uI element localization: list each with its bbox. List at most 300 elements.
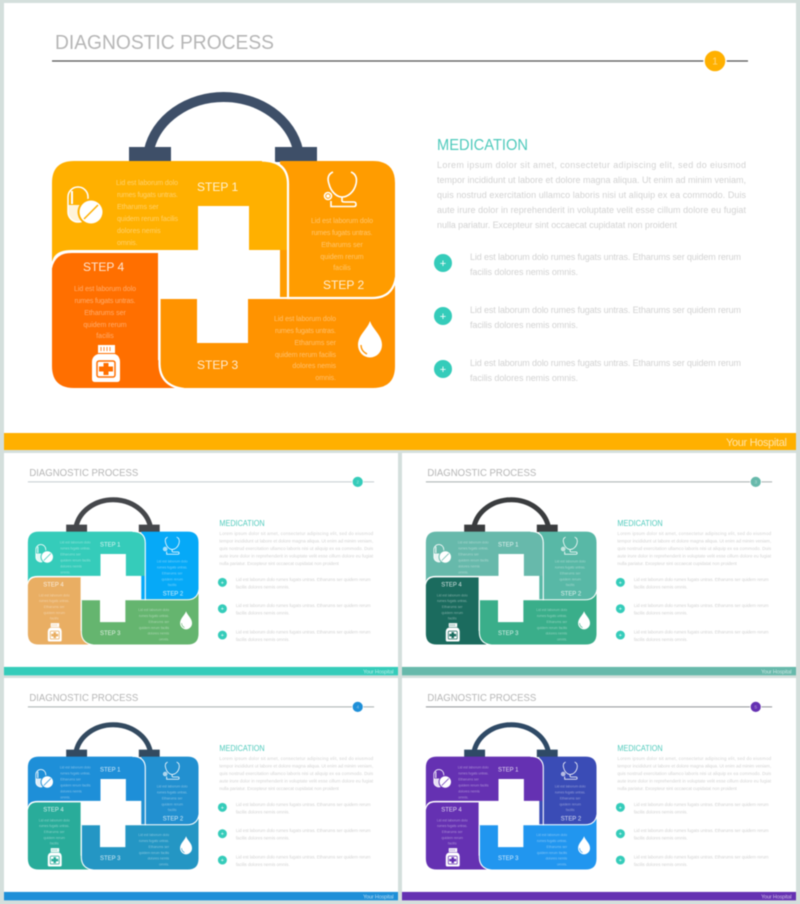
bullet 1: +: [619, 580, 622, 586]
step 2 text: facilis: [168, 808, 177, 812]
step 2 text: quidem rerum: [559, 802, 581, 806]
body paragraph: [219, 531, 374, 566]
bag handle: [464, 500, 558, 532]
step 2 text: rumes fugats untras.: [555, 565, 585, 569]
step 2 text: Etharums ser: [560, 571, 581, 575]
step 4 text: Etharums ser: [442, 830, 463, 834]
body paragraph: Lorem ipsum dolor sit amet, consectetur adipiscing elit, sed do eiusmod: [617, 531, 772, 536]
bullet 2: [434, 305, 741, 330]
step 3 label: STEP 3: [100, 631, 121, 637]
step 4 text: Lid est laborum dolo: [39, 818, 70, 822]
bullet 3: +: [221, 633, 224, 639]
step 3 text: Etharums ser: [547, 620, 568, 624]
step 3 text: omnis.: [557, 638, 567, 642]
step 4 text: Lid est laborum dolo: [437, 593, 468, 597]
title: DIAGNOSTIC PROCESS: [29, 693, 139, 704]
step 2 text: Lid est laborum dolo: [555, 559, 586, 563]
step 4 text: facilis: [50, 842, 59, 846]
step 2 text: facilis: [566, 808, 575, 812]
footer bar: Your Hospital: [726, 437, 787, 449]
bullet 3: +: [619, 633, 622, 639]
step 3 text: dolores nemis: [546, 632, 567, 636]
step 2 text: [311, 218, 373, 272]
step 4 text: [437, 593, 468, 621]
step 3 text: [536, 833, 568, 867]
bullet 2: [218, 828, 371, 841]
bullet 2: +: [619, 607, 622, 613]
step 1 text: Lid est laborum dolo: [60, 541, 91, 545]
icon: water drop: [180, 611, 192, 629]
step 4 label: STEP 4: [441, 807, 462, 813]
step 1 text: [458, 766, 489, 799]
bullet 1: facilis dolores nemis omnis.: [634, 809, 688, 814]
step 1 text: omnis.: [117, 240, 138, 247]
page number badge: 1: [712, 56, 718, 68]
step 2 text: rumes fugats untras.: [312, 230, 373, 237]
step 1 text: quidem rerum facilis: [458, 558, 489, 562]
step 4 text: rumes fugats untras.: [437, 824, 467, 828]
step 2 text: quidem rerum: [559, 577, 581, 581]
step 1 label: STEP 1: [498, 768, 519, 774]
footer bar: [402, 892, 796, 900]
step 1 text: [60, 766, 91, 799]
bullet 1: facilis dolores nemis omnis.: [236, 584, 290, 589]
step 1 text: Etharums ser: [458, 552, 480, 556]
panel: step 3: [81, 808, 199, 870]
bullet 2: [616, 828, 769, 841]
step 2 text: [555, 784, 586, 812]
step 4 text: facilis: [96, 333, 114, 340]
heading: medication: MEDICATION: [219, 519, 265, 528]
step 2 text: Lid est laborum dolo: [555, 784, 586, 788]
page number badge: 3: [754, 480, 757, 486]
step 4 text: Etharums ser: [44, 830, 65, 834]
step 4 text: Etharums ser: [44, 605, 65, 609]
bullet 1: +: [619, 805, 622, 811]
bullet 1: Lid est laborum dolo rumes fugats untras. Etharums ser quidem rerum: [236, 577, 371, 582]
body paragraph: nulla pariatur. Excepteur sint occaecat cupidatat non proident: [437, 220, 677, 230]
heading: medication: MEDICATION: [617, 744, 663, 753]
icon: stethoscope: [163, 762, 179, 779]
step 4 text: quidem rerum: [442, 836, 463, 840]
step 3 text: dolores nemis: [292, 363, 336, 370]
bullet 2: facilis dolores nemis omnis.: [236, 836, 290, 841]
icon: medicine bottle: [48, 623, 62, 642]
bullet 2: +: [221, 607, 224, 613]
step 1 text: rumes fugats untras.: [458, 772, 489, 776]
step 2 label: STEP 2: [561, 816, 582, 822]
bullet 1: [218, 802, 371, 814]
bullet 1: [434, 252, 741, 277]
body paragraph: [617, 531, 772, 566]
step 4 text: facilis: [448, 842, 457, 846]
footer bar: [4, 433, 796, 450]
panel: step 3: [81, 583, 199, 645]
bullet 3: [218, 855, 371, 867]
step 3 text: omnis.: [159, 638, 169, 642]
icon: stethoscope: [561, 762, 577, 779]
step 2 text: rumes fugats untras.: [555, 790, 585, 794]
title rule: [28, 706, 374, 708]
step 2 label: STEP 2: [163, 816, 184, 822]
body paragraph: nulla pariatur. Excepteur sint occaecat cupidatat non proident: [219, 786, 340, 791]
panel: step 4: [52, 253, 190, 388]
bullet 1: [616, 577, 769, 589]
step 3 text: [536, 608, 568, 642]
bullet 3: facilis dolores nemis omnis.: [236, 862, 290, 867]
bullet 2: +: [221, 832, 224, 838]
panel: step 1: [28, 757, 145, 808]
bullet 3: facilis dolores nemis omnis.: [634, 862, 688, 867]
step 2 text: quidem rerum: [161, 577, 183, 581]
footer bar: Your Hospital: [761, 669, 792, 675]
body paragraph: tempor incididunt ut labore et dolore magna aliqua. Ut enim ad minim veniam,: [219, 539, 373, 544]
body paragraph: quis nostrud exercitation ullamco laboris nisi ut aliquip ex ea commodo. Duis: [617, 546, 772, 551]
step 1 text: Etharums ser: [117, 204, 159, 211]
step 3 text: dolores nemis: [546, 857, 567, 861]
step 3 text: quidem rerum facilis: [275, 352, 336, 359]
step 3 label: STEP 3: [498, 631, 519, 637]
icon: water drop: [578, 611, 590, 629]
step 1 text: quidem rerum facilis: [117, 216, 178, 223]
step 3 text: omnis.: [159, 863, 169, 867]
step 3 text: [274, 316, 337, 382]
step 1 text: omnis.: [458, 570, 468, 574]
bullet 1: +: [221, 805, 224, 811]
step 3 text: Etharums ser: [294, 340, 337, 347]
panel: step 4: [426, 802, 495, 870]
body paragraph: [617, 756, 772, 791]
step 1 text: Etharums ser: [458, 777, 480, 781]
step 4 text: facilis: [448, 617, 457, 621]
slide 4: blue: [4, 678, 398, 900]
step 3 text: rumes fugats untras.: [537, 614, 567, 618]
medical bag: [27, 725, 199, 870]
body paragraph: tempor incididunt ut labore et dolore magna aliqua. Ut enim ad minim veniam,: [437, 175, 746, 185]
icon: pills: [68, 187, 104, 226]
body paragraph: aute irure dolor in reprehenderit in voluptate velit esse cillum dolore eu fugiat: [617, 778, 772, 783]
step 1 text: rumes fugats untras.: [117, 192, 178, 199]
bullet 3: facilis dolores nemis omnis.: [634, 637, 688, 642]
medical bag: [425, 725, 597, 870]
bullet 1: Lid est laborum dolo rumes fugats untras. Etharums ser quidem rerum: [470, 252, 741, 262]
page number badge: 4: [356, 705, 359, 711]
bullet 1: facilis dolores nemis omnis.: [634, 584, 688, 589]
bullet 3: [218, 630, 371, 642]
bullet 1: Lid est laborum dolo rumes fugats untras. Etharums ser quidem rerum: [634, 802, 769, 807]
panel: step 1: [28, 532, 145, 583]
bullet 2: +: [619, 832, 622, 838]
icon: stethoscope: [324, 172, 356, 206]
step 2 text: Etharums ser: [162, 796, 183, 800]
bullet 3: [616, 855, 769, 867]
slide 2: teal: [4, 453, 398, 675]
step 3 text: [138, 608, 170, 642]
step 4 text: rumes fugats untras.: [39, 824, 69, 828]
panel: step 2: [132, 757, 199, 824]
medical bag: [425, 500, 597, 645]
body paragraph: [219, 756, 374, 791]
bullet 2: Lid est laborum dolo rumes fugats untras. Etharums ser quidem rerum: [236, 603, 371, 608]
step 1 text: Etharums ser: [60, 777, 82, 781]
title: DIAGNOSTIC PROCESS: [29, 468, 139, 479]
title rule: [426, 481, 772, 483]
step 2 text: rumes fugats untras.: [157, 790, 187, 794]
footer bar: Your Hospital: [363, 894, 394, 900]
step 4 text: Lid est laborum dolo: [74, 286, 136, 293]
page number badge: [750, 476, 761, 487]
icon: medicine bottle: [446, 848, 460, 867]
bullet 2: facilis dolores nemis omnis.: [634, 611, 688, 616]
step 1 text: [458, 541, 489, 574]
page number badge: 2: [356, 480, 359, 486]
step 3 text: quidem rerum facilis: [139, 851, 169, 855]
title rule: [426, 706, 772, 708]
bullet 1: facilis dolores nemis omnis.: [470, 267, 578, 277]
step 3 text: omnis.: [557, 863, 567, 867]
slide 5: purple: [402, 678, 796, 900]
page number badge: [352, 701, 363, 712]
body paragraph: quis nostrud exercitation ullamco laboris nisi ut aliquip ex ea commodo. Duis: [219, 546, 374, 551]
step 1 text: quidem rerum facilis: [458, 783, 489, 787]
step 3 text: dolores nemis: [148, 632, 169, 636]
step 1 label: STEP 1: [100, 543, 121, 549]
step 2 label: STEP 2: [163, 591, 184, 597]
step 3 label: STEP 3: [100, 856, 121, 862]
step 1 text: [60, 541, 91, 574]
bullet 3: +: [221, 858, 224, 864]
bullet 2: [218, 603, 371, 616]
bullet 2: Lid est laborum dolo rumes fugats untras. Etharums ser quidem rerum: [634, 828, 769, 833]
step 1 label: STEP 1: [100, 768, 121, 774]
step 4 text: Lid est laborum dolo: [437, 818, 468, 822]
step 2 text: Etharums ser: [321, 242, 363, 249]
icon: stethoscope: [561, 537, 577, 554]
bullet 2: facilis dolores nemis omnis.: [470, 320, 578, 330]
panel: step 3: [479, 583, 597, 645]
heading: medication: MEDICATION: [219, 744, 265, 753]
footer bar: [4, 667, 398, 675]
bullet 1: Lid est laborum dolo rumes fugats untras. Etharums ser quidem rerum: [634, 577, 769, 582]
body paragraph: tempor incididunt ut labore et dolore magna aliqua. Ut enim ad minim veniam,: [617, 764, 771, 769]
step 2 text: [555, 559, 586, 587]
step 4 text: rumes fugats untras.: [437, 599, 467, 603]
step 3 text: quidem rerum facilis: [537, 626, 567, 630]
step 2 text: facilis: [168, 583, 177, 587]
step 1 text: dolores nemis: [60, 789, 82, 793]
step 3 text: Lid est laborum dolo: [138, 608, 169, 612]
bag handle: [464, 725, 558, 757]
bullet 3: [616, 630, 769, 642]
panel: step 3: [159, 265, 395, 388]
body paragraph: Lorem ipsum dolor sit amet, consectetur adipiscing elit, sed do eiusmod: [219, 531, 374, 536]
step 2 text: Etharums ser: [162, 571, 183, 575]
bullet 2: Lid est laborum dolo rumes fugats untras. Etharums ser quidem rerum: [470, 305, 741, 315]
panel: step 4: [28, 802, 97, 870]
step 1 text: rumes fugats untras.: [458, 547, 489, 551]
step 4 text: Lid est laborum dolo: [39, 593, 70, 597]
step 4 label: STEP 4: [43, 807, 64, 813]
bullet 2: facilis dolores nemis omnis.: [236, 611, 290, 616]
step 1 text: dolores nemis: [117, 228, 161, 235]
step 1 text: Etharums ser: [60, 552, 82, 556]
step 3 text: dolores nemis: [148, 857, 169, 861]
bullet 3: Lid est laborum dolo rumes fugats untras. Etharums ser quidem rerum: [470, 358, 741, 368]
step 3 text: quidem rerum facilis: [139, 626, 169, 630]
step 1 text: quidem rerum facilis: [60, 783, 91, 787]
step 1 text: rumes fugats untras.: [60, 547, 91, 551]
step 4 text: quidem rerum: [44, 611, 65, 615]
footer bar: [4, 892, 398, 900]
step 2 label: STEP 2: [561, 591, 582, 597]
icon: water drop: [358, 321, 382, 357]
bullet 3: Lid est laborum dolo rumes fugats untras. Etharums ser quidem rerum: [236, 630, 371, 635]
bullet 1: [218, 577, 371, 589]
step 1 text: Lid est laborum dolo: [60, 766, 91, 770]
footer bar: Your Hospital: [761, 894, 792, 900]
step 4 text: rumes fugats untras.: [74, 298, 136, 305]
step 4 text: quidem rerum: [442, 611, 463, 615]
step 3 label: STEP 3: [498, 856, 519, 862]
step 1 text: quidem rerum facilis: [60, 558, 91, 562]
bullet 3: +: [440, 364, 446, 376]
step 3 text: quidem rerum facilis: [537, 851, 567, 855]
step 2 text: Lid est laborum dolo: [157, 559, 188, 563]
step 1 text: dolores nemis: [60, 564, 82, 568]
body paragraph: aute irure dolor in reprehenderit in voluptate velit esse cillum dolore eu fugiat: [219, 553, 374, 558]
body paragraph: aute irure dolor in reprehenderit in voluptate velit esse cillum dolore eu fugiat: [617, 553, 772, 558]
title rule: [28, 481, 374, 483]
body paragraph: Lorem ipsum dolor sit amet, consectetur adipiscing elit, sed do eiusmod: [617, 756, 772, 761]
step 3 text: rumes fugats untras.: [139, 839, 169, 843]
step 4 label: STEP 4: [441, 582, 462, 588]
step 3 text: Lid est laborum dolo: [274, 316, 336, 323]
step 2 text: facilis: [566, 583, 575, 587]
step 4 text: [437, 818, 468, 846]
body paragraph: [437, 160, 746, 230]
heading: medication: MEDICATION: [437, 137, 528, 154]
step 3 text: Etharums ser: [149, 845, 170, 849]
footer bar: [402, 667, 796, 675]
step 2 text: Etharums ser: [560, 796, 581, 800]
page number badge: 5: [754, 705, 757, 711]
bullet 1: Lid est laborum dolo rumes fugats untras. Etharums ser quidem rerum: [236, 802, 371, 807]
panel: step 4: [426, 577, 495, 645]
step 4 text: Etharums ser: [84, 310, 126, 317]
step 1 text: dolores nemis: [458, 564, 480, 568]
bullet 2: facilis dolores nemis omnis.: [634, 836, 688, 841]
body paragraph: quis nostrud exercitation ullamco laboris nisi ut aliquip ex ea commodo. Duis: [437, 190, 746, 200]
step 3 text: rumes fugats untras.: [537, 839, 567, 843]
bullet 3: +: [619, 858, 622, 864]
slide 3: sage green: [402, 453, 796, 675]
step 1 label: STEP 1: [498, 543, 519, 549]
step 3 text: Etharums ser: [547, 845, 568, 849]
panel: step 2: [262, 161, 395, 297]
bullet 1: facilis dolores nemis omnis.: [236, 809, 290, 814]
step 4 text: [74, 286, 136, 340]
bullet 2: Lid est laborum dolo rumes fugats untras. Etharums ser quidem rerum: [634, 603, 769, 608]
step 3 text: omnis.: [315, 375, 336, 382]
body paragraph: quis nostrud exercitation ullamco laboris nisi ut aliquip ex ea commodo. Duis: [219, 771, 374, 776]
step 1 text: Lid est laborum dolo: [458, 766, 489, 770]
slide 1: orange: [4, 3, 796, 450]
step 1 label: STEP 1: [197, 180, 238, 194]
step 1 text: dolores nemis: [458, 789, 480, 793]
step 2 text: [157, 559, 188, 587]
step 4 text: quidem rerum: [44, 836, 65, 840]
step 1 text: omnis.: [60, 795, 70, 799]
body paragraph: tempor incididunt ut labore et dolore magna aliqua. Ut enim ad minim veniam,: [219, 764, 373, 769]
body paragraph: aute irure dolor in reprehenderit in voluptate velit esse cillum dolore eu fugiat: [437, 205, 746, 215]
icon: pills: [36, 545, 54, 564]
medical bag: [27, 500, 199, 645]
body paragraph: nulla pariatur. Excepteur sint occaecat cupidatat non proident: [617, 561, 738, 566]
step 1 text: Lid est laborum dolo: [458, 541, 489, 545]
body paragraph: quis nostrud exercitation ullamco laboris nisi ut aliquip ex ea commodo. Duis: [617, 771, 772, 776]
body paragraph: tempor incididunt ut labore et dolore magna aliqua. Ut enim ad minim veniam,: [617, 539, 771, 544]
icon: medicine bottle: [92, 345, 120, 382]
step 1 text: [116, 180, 178, 247]
body paragraph: Lorem ipsum dolor sit amet, consectetur adipiscing elit, sed do eiusmod: [437, 160, 746, 170]
bullet 2: [616, 603, 769, 616]
body paragraph: Lorem ipsum dolor sit amet, consectetur adipiscing elit, sed do eiusmod: [219, 756, 374, 761]
step 3 text: rumes fugats untras.: [139, 614, 169, 618]
step 3 label: STEP 3: [197, 358, 238, 372]
bag handle: [129, 97, 317, 162]
bullet 3: Lid est laborum dolo rumes fugats untras. Etharums ser quidem rerum: [236, 855, 371, 860]
step 2 text: Lid est laborum dolo: [311, 218, 373, 225]
step 2 text: quidem rerum: [320, 254, 364, 261]
bullet 1: [616, 802, 769, 814]
icon: water drop: [180, 836, 192, 854]
step 2 label: STEP 2: [323, 278, 364, 292]
step 3 text: rumes fugats untras.: [275, 328, 336, 335]
step 1 text: omnis.: [60, 570, 70, 574]
step 2 text: facilis: [333, 265, 351, 272]
step 2 text: [157, 784, 188, 812]
bullet 3: [434, 358, 741, 383]
step 1 text: rumes fugats untras.: [60, 772, 91, 776]
panel: step 4: [28, 577, 97, 645]
bullet 3: Lid est laborum dolo rumes fugats untras. Etharums ser quidem rerum: [634, 630, 769, 635]
icon: medicine bottle: [446, 623, 460, 642]
title: DIAGNOSTIC PROCESS: [427, 693, 537, 704]
bullet 3: facilis dolores nemis omnis.: [236, 637, 290, 642]
page number badge: [750, 701, 761, 712]
step 2 text: quidem rerum: [161, 802, 183, 806]
panel: step 3: [479, 808, 597, 870]
icon: pills: [434, 770, 452, 789]
step 4 text: Etharums ser: [442, 605, 463, 609]
bullet 2: Lid est laborum dolo rumes fugats untras. Etharums ser quidem rerum: [236, 828, 371, 833]
title: DIAGNOSTIC PROCESS: [55, 32, 274, 54]
body paragraph: nulla pariatur. Excepteur sint occaecat cupidatat non proident: [617, 786, 738, 791]
step 1 text: omnis.: [458, 795, 468, 799]
panel: step 2: [132, 532, 199, 599]
step 4 text: [39, 818, 70, 846]
step 3 text: Lid est laborum dolo: [536, 608, 567, 612]
step 3 text: Etharums ser: [149, 620, 170, 624]
body paragraph: nulla pariatur. Excepteur sint occaecat cupidatat non proident: [219, 561, 340, 566]
bullet 3: facilis dolores nemis omnis.: [470, 373, 578, 383]
bullet 3: Lid est laborum dolo rumes fugats untras. Etharums ser quidem rerum: [634, 855, 769, 860]
bullet 1: +: [221, 580, 224, 586]
icon: pills: [434, 545, 452, 564]
step 1 text: Lid est laborum dolo: [116, 180, 178, 187]
panel: step 2: [530, 532, 597, 599]
bag handle: [66, 725, 160, 757]
